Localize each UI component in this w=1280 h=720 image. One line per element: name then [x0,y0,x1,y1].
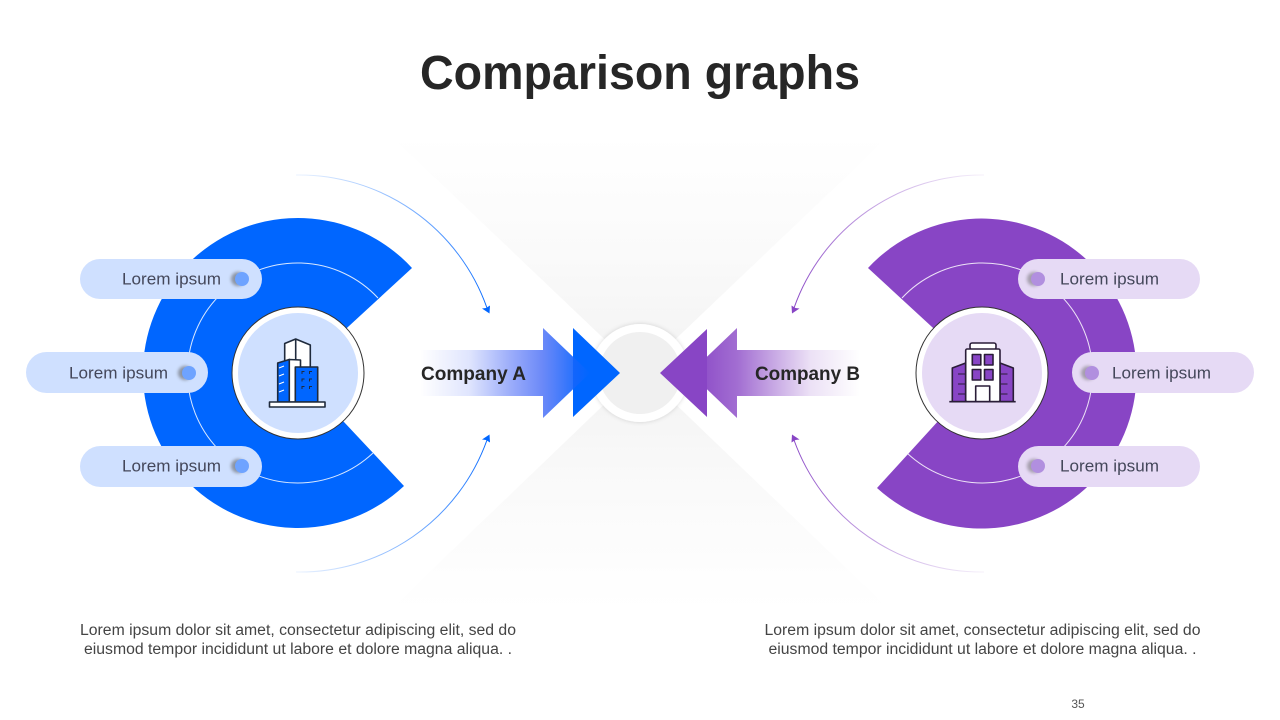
pill: left middle: Lorem ipsum [69,364,168,382]
arrow: curved top left [296,175,490,314]
pill: right top [1018,259,1200,299]
pill: right middle: Lorem ipsum [1112,364,1211,382]
arrow: company A [420,328,620,418]
pill: left middle [26,352,208,393]
text block: company B description: eiusmod tempor incididunt ut labore et dolore magna aliqua. . [768,641,1196,658]
panel: company A ring [143,218,412,528]
pill: left bottom: Lorem ipsum [122,456,221,476]
background: bottom fade wedge [390,370,890,610]
text block: company A description: Lorem ipsum dolor sit amet, consectetur adipiscing elit, sed do [80,622,516,639]
text block: company A description [80,622,516,658]
center circle [591,324,689,422]
page number: 35 [1071,697,1085,711]
pill: left bottom [80,446,262,487]
pill: right middle [1072,352,1254,393]
label: company A: Company A [421,364,526,385]
pill: right bottom [1018,446,1200,487]
panel: company B ring [868,219,1137,529]
pill: left top: Lorem ipsum [122,270,221,288]
icon: company A buildings [232,307,364,439]
arrow: curved top right [792,175,984,314]
pill: left top [80,259,262,299]
text block: company B description [764,622,1200,658]
text block: company B description: Lorem ipsum dolor sit amet, consectetur adipiscing elit, sed do [764,622,1200,639]
text block: company A description: eiusmod tempor incididunt ut labore et dolore magna aliqua. . [84,641,512,658]
label: company B: Company B [755,364,860,385]
arrow: curved bottom left [296,434,490,572]
icon: company B building [916,307,1048,439]
background: top fade wedge [390,135,890,373]
pill: right bottom: Lorem ipsum [1060,456,1159,476]
arrow: company B [660,328,860,418]
arrow: curved bottom right [792,434,984,572]
pill: right top: Lorem ipsum [1060,270,1159,288]
title: Comparison graphs [420,47,860,100]
